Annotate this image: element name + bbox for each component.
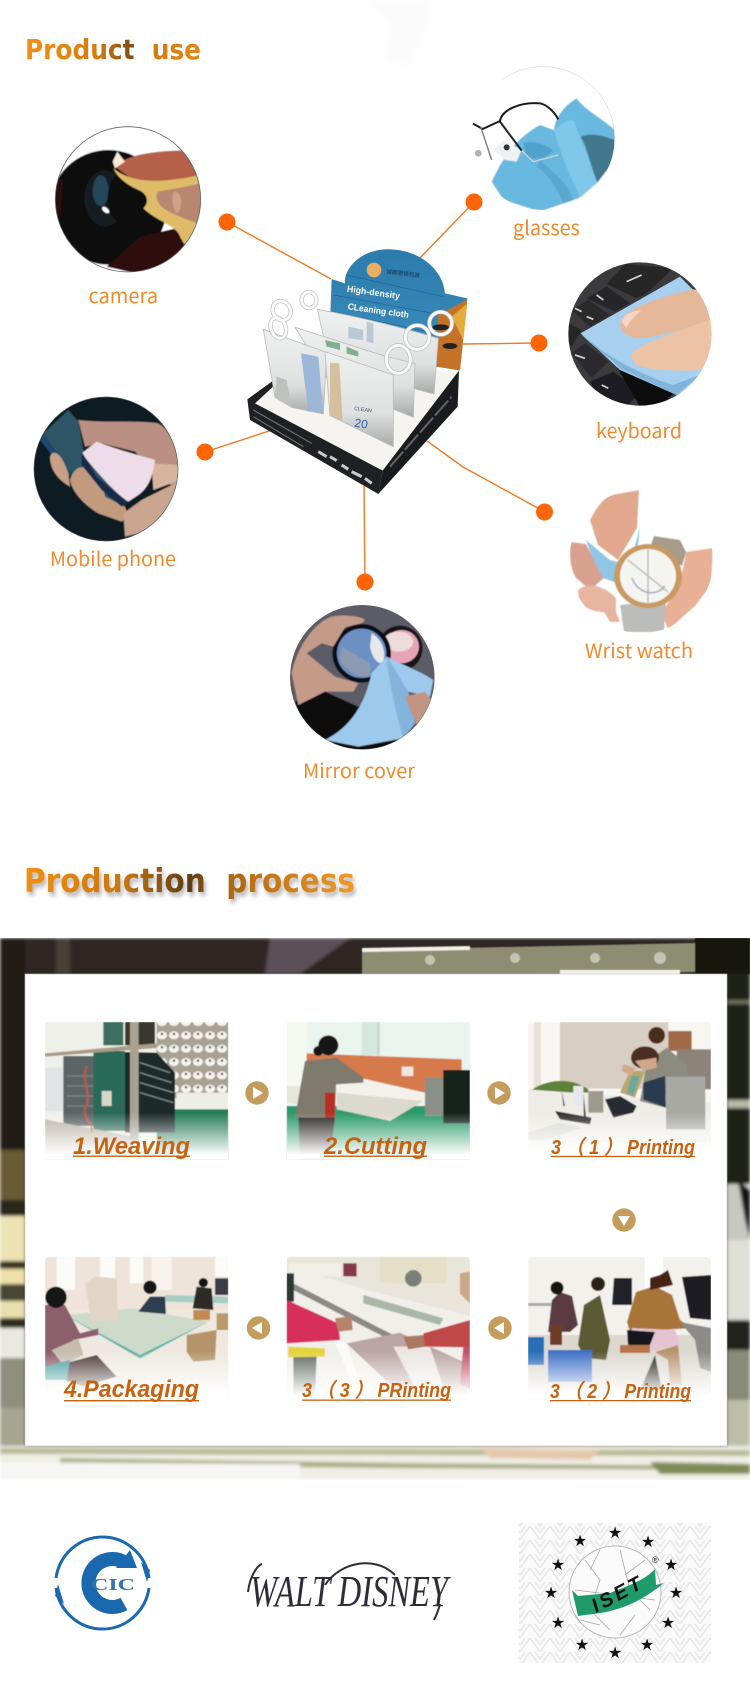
stars: ★ [551, 1613, 565, 1632]
stars: ★ [573, 1531, 587, 1550]
logo: ISET: ISET [588, 1571, 648, 1617]
pouch ring outlines [268, 292, 452, 373]
photo: mirror cover wipe [288, 603, 437, 752]
box back panel [330, 249, 467, 371]
factory background band [0, 938, 750, 1480]
stars: ★ [608, 1523, 622, 1542]
label: glasses: glasses [513, 212, 580, 241]
stars: ★ [641, 1532, 655, 1551]
box back panel: High-density [346, 284, 401, 301]
stars: ★ [669, 1583, 683, 1602]
arrow: printing 2 to printing 3 [488, 1316, 512, 1340]
stars: ★ [551, 1555, 565, 1574]
green banner [572, 1569, 664, 1616]
title: Product use: Product use [25, 33, 201, 66]
step label: 1.Weaving: 1.Weaving [73, 1133, 190, 1160]
product: display box of cleaning cloths [247, 249, 467, 494]
box tray [247, 370, 459, 494]
label: Mobile phone: Mobile phone [50, 543, 176, 572]
logo: CIC: CIC [91, 1575, 135, 1594]
title: Production process: Production process [24, 861, 355, 900]
label: Wrist watch: Wrist watch [585, 635, 693, 664]
step label: 3(1) Printing: 3 （ 1 ） Printing [551, 1136, 695, 1159]
photo: packaging [45, 1257, 228, 1400]
stars: ★ [664, 1555, 678, 1574]
arrow: weaving to cutting [245, 1081, 269, 1105]
stars: ★ [661, 1613, 675, 1632]
step label: 3(3) PRinting: 3 （ 3 ） PRinting [302, 1379, 451, 1402]
photo: cutting [287, 1022, 470, 1159]
logo: ISET [519, 1523, 711, 1663]
step label: 3(2) Printing: 3 （ 2 ） Printing [550, 1380, 691, 1403]
photo: camera lens cleaning [50, 123, 203, 277]
step label: 2.Cutting: 2.Cutting [323, 1133, 427, 1160]
photo: keyboard with blue cloth [567, 260, 713, 408]
pouches [263, 309, 438, 447]
photo: glasses with blue cloth [470, 65, 617, 212]
metal bar [362, 938, 750, 978]
connector lines [205, 202, 545, 582]
panel: process flow card [25, 974, 727, 1446]
label: Mirror cover: Mirror cover [303, 755, 415, 784]
photo: mobile phone wipe [32, 395, 182, 545]
photo: printing 1 [528, 1022, 711, 1142]
stars: ★ [608, 1643, 622, 1662]
globe [569, 1546, 661, 1638]
connector dots [196, 194, 553, 590]
logo: ISET: ® [652, 1555, 659, 1565]
pouches: CLEAN [354, 406, 372, 414]
label: keyboard: keyboard [596, 415, 682, 444]
logo: CIC [55, 1537, 150, 1629]
photo: wrist watch wipe [565, 487, 715, 637]
pouch rings [268, 292, 452, 373]
logo: Walt Disney [248, 1563, 451, 1620]
arrow: printing 1 to printing 2 [612, 1208, 636, 1232]
box back panel: 诚朗眼镜包装 [386, 266, 421, 279]
stars [544, 1523, 683, 1662]
photo: weaving [45, 1022, 228, 1159]
photo: printing 2 [528, 1257, 711, 1400]
pouches: 20 [354, 416, 369, 432]
stars: ★ [544, 1583, 558, 1602]
step label: 4.Packaging: 4.Packaging [63, 1376, 199, 1403]
stars: ★ [640, 1635, 654, 1654]
arrow: cutting to printing [487, 1081, 511, 1105]
box back panel: CLeaning cloth [347, 301, 409, 320]
stars: ★ [575, 1635, 589, 1654]
photo: printing 3 [287, 1257, 470, 1400]
label: camera: camera [88, 280, 158, 309]
arrow: printing 3 to packaging [247, 1316, 270, 1340]
logo: Walt Disney: WALT DISNEY [250, 1567, 451, 1616]
